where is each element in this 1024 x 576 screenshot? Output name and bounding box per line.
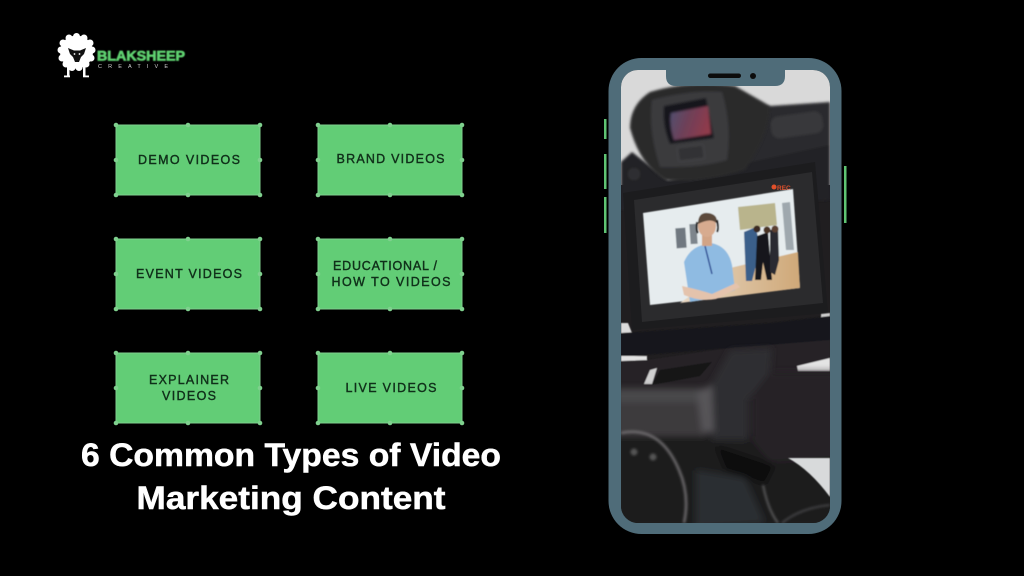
card: Explainer Videos: EXPLAINER — [149, 373, 229, 387]
card: Brand Videos: BRAND VIDEOS — [336, 152, 444, 166]
card: Brand Videos — [316, 123, 464, 197]
dial rings — [621, 432, 830, 523]
card: Educational / How To Videos — [316, 237, 464, 311]
card: Educational / How To Videos: HOW TO VIDEOS — [332, 275, 450, 289]
flip monitor — [623, 162, 818, 208]
blurred lens and rig — [616, 348, 836, 528]
card: Demo Videos: DEMO VIDEOS — [138, 153, 240, 167]
card: Event Videos — [114, 237, 262, 311]
card: Demo Videos — [114, 123, 262, 197]
icon: sheep — [58, 33, 96, 77]
photo background — [621, 70, 830, 185]
people in background — [744, 226, 779, 281]
phone side buttons — [604, 119, 846, 233]
presenter — [682, 213, 740, 302]
phone screen: camera photo — [616, 70, 836, 528]
REC indicator — [772, 184, 790, 190]
wordmark: CREATIVE: CREATIVE — [98, 64, 168, 70]
card: Live Videos: LIVE VIDEOS — [346, 381, 436, 395]
speaker — [708, 74, 741, 78]
title: 6 Common Types of Video — [81, 437, 501, 473]
title: Marketing Content — [136, 480, 446, 516]
phone mockup — [604, 58, 846, 534]
phone notch — [666, 68, 785, 86]
card: Live Videos — [316, 351, 464, 425]
monitor hinge and tripod bracket — [621, 312, 830, 385]
camera body top right — [621, 102, 830, 210]
logo: Blaksheep Creative — [58, 33, 185, 77]
viewfinder eyepiece — [630, 84, 770, 181]
title — [81, 437, 501, 516]
card: Explainer Videos — [114, 351, 262, 425]
card: Educational / How To Videos: EDUCATIONAL / — [333, 259, 438, 273]
phone body — [608, 58, 842, 534]
wordmark: BLAKSHEEP: BLAKSHEEP — [97, 48, 185, 64]
card: Explainer Videos: VIDEOS — [162, 389, 216, 403]
monitor video feed — [643, 189, 800, 305]
white background corner — [788, 458, 830, 497]
REC indicator: REC — [777, 185, 791, 192]
front camera — [750, 73, 756, 79]
card: Event Videos: EVENT VIDEOS — [136, 267, 242, 281]
